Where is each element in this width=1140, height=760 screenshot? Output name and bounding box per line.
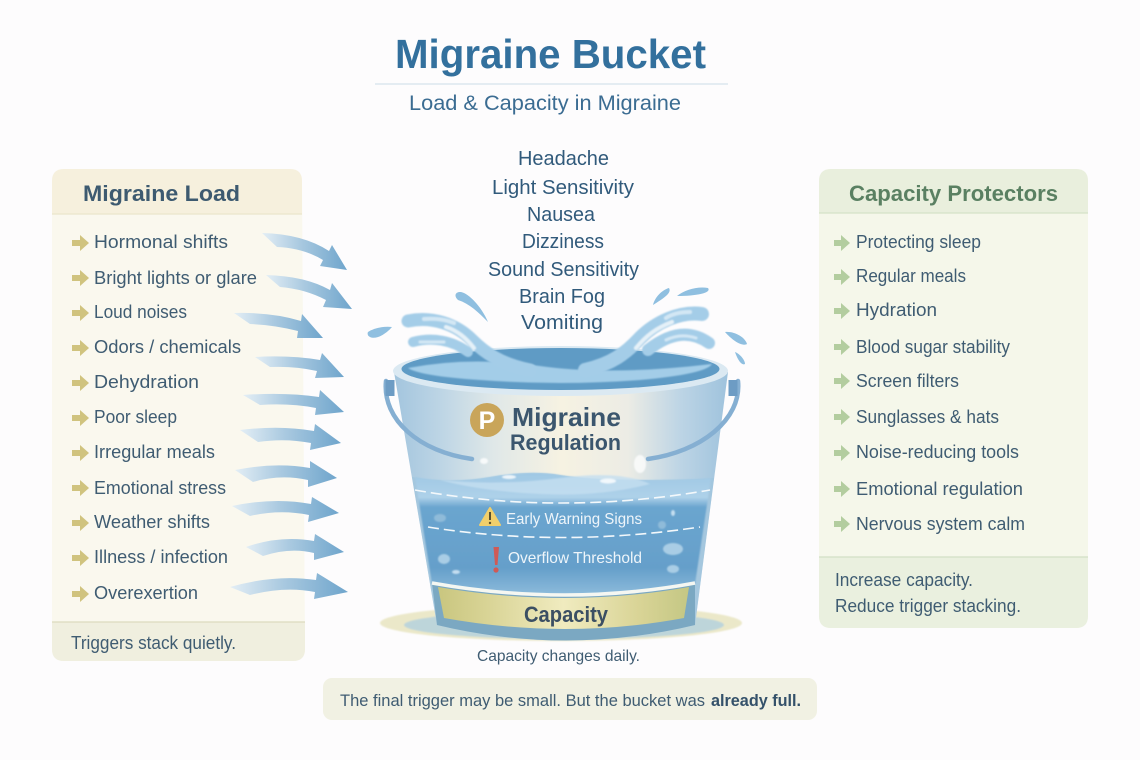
panel footer: increase capacity (819, 557, 1088, 628)
trigger list: Bright lights or glare (94, 267, 257, 288)
symptoms list: Dizziness (522, 230, 604, 253)
symptoms list: Light Sensitivity (492, 176, 635, 199)
subtitle: Load & Capacity in Migraine (409, 92, 681, 115)
trigger list: Hormonal shifts (94, 231, 228, 252)
protector list: Sunglasses & hats (856, 406, 999, 427)
splash right (585, 312, 709, 370)
symptoms list (488, 147, 640, 334)
protector list: Protecting sleep (856, 231, 981, 252)
panel: capacity protectors (819, 169, 1088, 628)
trigger list: Loud noises (94, 301, 187, 322)
bucket rim and surface water (393, 346, 728, 396)
symptoms list: Nausea (527, 203, 596, 226)
protector list: Emotional regulation (856, 478, 1023, 499)
trigger list: Irregular meals (94, 441, 215, 462)
label: migraine regulation: Regulation (510, 430, 621, 455)
protector list (834, 231, 1025, 534)
panel header: migraine load (52, 169, 302, 214)
protector list: Blood sugar stability (856, 336, 1011, 357)
panel footer: triggers stack quietly: Triggers stack quietly. (71, 633, 236, 653)
trigger list: Emotional stress (94, 477, 226, 498)
callout: final trigger (323, 678, 817, 720)
symptoms list: Vomiting (521, 311, 603, 334)
panel footer: increase capacity: Reduce trigger stacking. (835, 596, 1021, 616)
protector list: Nervous system calm (856, 513, 1025, 534)
symptoms list: Brain Fog (519, 285, 605, 308)
panel header: capacity protectors: Capacity Protectors (849, 181, 1058, 206)
label: migraine regulation (470, 402, 621, 455)
trigger list: Overexertion (94, 582, 198, 603)
water level (415, 473, 711, 595)
label: early warning signs: Early Warning Signs (506, 511, 642, 528)
panel footer: triggers stack quietly (52, 622, 305, 661)
protector list: Screen filters (856, 370, 959, 391)
panel: migraine load (52, 169, 305, 661)
arrows: triggers flowing into bucket (230, 233, 352, 599)
protector list: Hydration (856, 299, 937, 320)
label: overflow threshold (493, 547, 642, 573)
panel header: migraine load: Migraine Load (83, 181, 240, 206)
water droplets (368, 287, 747, 364)
callout: final trigger: The final trigger may be small. But the bucket was (340, 691, 705, 710)
symptoms list: Headache (518, 147, 609, 170)
panel footer: increase capacity: Increase capacity. (835, 570, 973, 590)
dashed threshold lines (415, 490, 710, 538)
capacity band (432, 583, 695, 640)
callout: final trigger: already full. (711, 691, 801, 710)
bucket handle (386, 380, 738, 459)
label: early warning signs (480, 508, 642, 528)
symptoms list: Sound Sensitivity (488, 258, 640, 281)
bucket illustration (368, 287, 747, 641)
trigger list (72, 231, 257, 603)
panel header: capacity protectors (819, 169, 1088, 213)
label: overflow threshold: Overflow Threshold (508, 550, 642, 567)
label: migraine regulation: Migraine (512, 402, 621, 432)
trigger list: Poor sleep (94, 406, 177, 427)
protector list: Noise-reducing tools (856, 441, 1019, 462)
label: migraine regulation: P (479, 407, 495, 435)
glass tint below water line (412, 473, 714, 640)
trigger list: Dehydration (94, 371, 199, 392)
trigger list: Odors / chemicals (94, 336, 241, 357)
bucket body (394, 372, 728, 640)
trigger list: Illness / infection (94, 546, 228, 567)
trigger list: Weather shifts (94, 511, 210, 532)
bucket base shadow (380, 605, 742, 641)
title: Migraine Bucket (395, 31, 706, 77)
caption: capacity changes daily: Capacity changes daily. (477, 648, 640, 665)
splash left (408, 319, 530, 370)
capacity band: Capacity (524, 602, 609, 627)
protector list: Regular meals (856, 265, 966, 286)
